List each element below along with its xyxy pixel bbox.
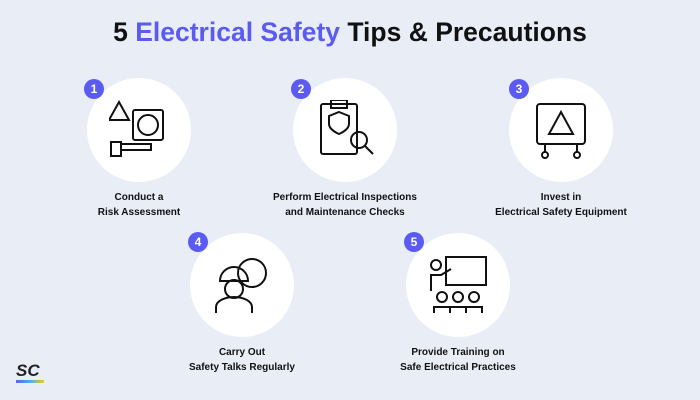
label 4: Carry Out [219,347,265,358]
badge 1: 1 [91,82,97,96]
title: 5 Electrical Safety Tips & Precautions [113,17,587,47]
label 2 [273,192,417,218]
label 5: Safe Electrical Practices [400,362,516,373]
label 5: Provide Training on [411,347,505,358]
panel: tip 3 [495,78,627,218]
logo: SC [16,361,40,380]
label 4: Safety Talks Regularly [189,362,295,373]
label 4 [189,347,295,373]
label 2: Perform Electrical Inspections [273,192,417,203]
badge 2: 2 [298,82,304,96]
label 1: Conduct a [115,192,163,203]
circle 5 [406,233,510,337]
badge 4: 4 [195,235,201,249]
badge 2 [291,79,311,99]
label 2: and Maintenance Checks [285,207,405,218]
badge 5 [404,232,424,252]
label 3: Invest in [541,192,581,203]
badge 1 [84,79,104,99]
label 1: Risk Assessment [98,207,180,218]
circle 2 [293,78,397,182]
label 5 [400,347,516,373]
badge 5: 5 [411,235,417,249]
label 1 [98,192,180,218]
badge 3: 3 [516,82,522,96]
circle 1 [87,78,191,182]
panel: tip 5 [400,232,516,373]
panel: tip 4 [188,232,295,373]
badge 4 [188,232,208,252]
label 3: Electrical Safety Equipment [495,207,627,218]
label 3 [495,192,627,218]
badge 3 [509,79,529,99]
circle 4 [190,233,294,337]
circle 3 [509,78,613,182]
panel: tip 1 [84,78,191,218]
panel: tip 2 [273,78,417,218]
